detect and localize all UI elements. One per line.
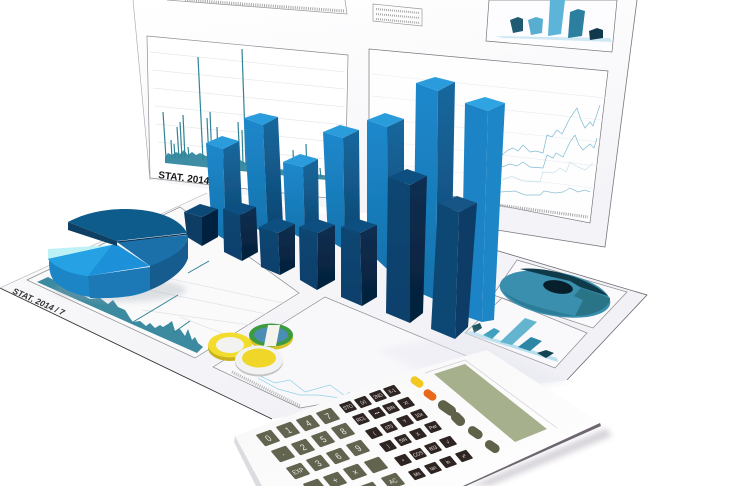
function keys: (: [372, 431, 378, 436]
translucent slice: [48, 245, 112, 259]
bar 1: [184, 204, 218, 246]
number keys: 9: [353, 443, 364, 453]
function keys: X: [415, 431, 423, 438]
bar 3: [283, 154, 319, 240]
bar 6: [386, 169, 427, 323]
function keys: x²: [461, 453, 469, 460]
series lines: [500, 105, 600, 195]
panel: upper-left cropped table strip: [167, 0, 347, 14]
function keys: Y: [402, 418, 410, 425]
bar 3: [259, 218, 295, 275]
function keys: √: [444, 439, 452, 446]
yellow and orange buttons: [409, 375, 438, 402]
function keys: ln: [445, 459, 452, 466]
shadow: calculator: [470, 428, 612, 486]
panel: small bar chart: [465, 298, 587, 368]
shadow: lavender tint beneath calculator: [380, 330, 570, 400]
number keys: 2: [298, 442, 309, 452]
calculator: [234, 350, 601, 486]
calculator body: [235, 350, 600, 486]
olive oval buttons: [436, 398, 501, 455]
number keys: +: [330, 475, 341, 485]
function keys: 2ND: [372, 392, 385, 401]
function keys: 070: [384, 424, 395, 431]
spike series: [163, 49, 336, 181]
function keys: [339, 385, 473, 480]
number keys: 3: [313, 458, 324, 468]
display: [425, 360, 557, 442]
number keys: ·: [278, 450, 288, 459]
dark back slice: [68, 209, 187, 241]
number keys: AC: [387, 477, 400, 486]
number keys: EXP: [291, 467, 306, 476]
icon: coins: [208, 324, 293, 376]
bar 4: [299, 219, 335, 290]
number keys: 6: [333, 451, 344, 461]
panel: upper report sheet: [133, 0, 637, 247]
yellow coin: [208, 332, 252, 361]
bar 5: [341, 219, 377, 306]
function keys: X-1: [387, 388, 398, 395]
outer rim: [49, 260, 150, 298]
function keys: BIN: [386, 405, 397, 412]
function keys: ): [386, 444, 392, 449]
panel: lower-left chart: [11, 207, 299, 358]
bar chart: upper right panel: [486, 0, 617, 52]
line chart panel: right: [369, 49, 608, 223]
bar 2: [244, 113, 283, 235]
number keys: ×: [350, 467, 361, 477]
bar 6: [413, 77, 455, 305]
number keys: 1: [283, 425, 294, 435]
spike series: [37, 261, 209, 353]
function keys: •: [401, 458, 407, 463]
number keys: [256, 408, 405, 486]
function keys: COS: [412, 450, 426, 459]
panel: lower report sheet: [0, 77, 647, 486]
function keys: (x): [359, 399, 368, 406]
right slice: [117, 235, 188, 266]
function keys: 603: [428, 445, 439, 452]
chart: 3D donut: [496, 263, 614, 325]
panel: lower-middle chart: [213, 297, 505, 408]
function keys: 10x: [414, 412, 425, 419]
function keys: X!: [402, 400, 411, 407]
panel: donut frame: [493, 260, 627, 328]
bar chart: 3D back row of bright blue bars: [206, 77, 505, 322]
bar 2: [223, 202, 258, 261]
number keys: 7: [323, 411, 334, 421]
number keys: 5: [318, 434, 329, 444]
bar 5: [367, 113, 404, 280]
bar chart: 3D front row of dark navy bars: [184, 169, 477, 339]
axis tick strip: [498, 205, 588, 217]
number keys: 0: [263, 433, 274, 443]
mid slice: [48, 244, 150, 276]
function keys: STO: [342, 403, 355, 412]
pie shadow: [54, 278, 186, 302]
green coin: [249, 324, 293, 350]
number keys: 8: [338, 426, 349, 436]
function keys: Ms: [413, 471, 423, 478]
function keys: Pwr: [428, 424, 440, 431]
panel: small number table: [373, 4, 422, 26]
chart: 3D pie: [48, 209, 188, 302]
line chart panel frame: left: [147, 36, 348, 200]
function keys: SIN: [398, 437, 409, 444]
bar 4: [323, 125, 360, 250]
function keys: •••: [373, 410, 382, 417]
bar 7: [461, 97, 505, 322]
number keys: 4: [303, 418, 314, 428]
heading: stat label lower: STAT. 2014 / 7: [11, 286, 67, 318]
white coin: [235, 346, 283, 376]
bar 7: [431, 196, 477, 339]
bar 1: [206, 136, 243, 240]
function keys: RCL: [355, 415, 368, 424]
heading: stat label upper: STAT. 2014 /: [158, 170, 216, 188]
function keys: tan: [428, 465, 439, 472]
light slice: [48, 245, 112, 276]
